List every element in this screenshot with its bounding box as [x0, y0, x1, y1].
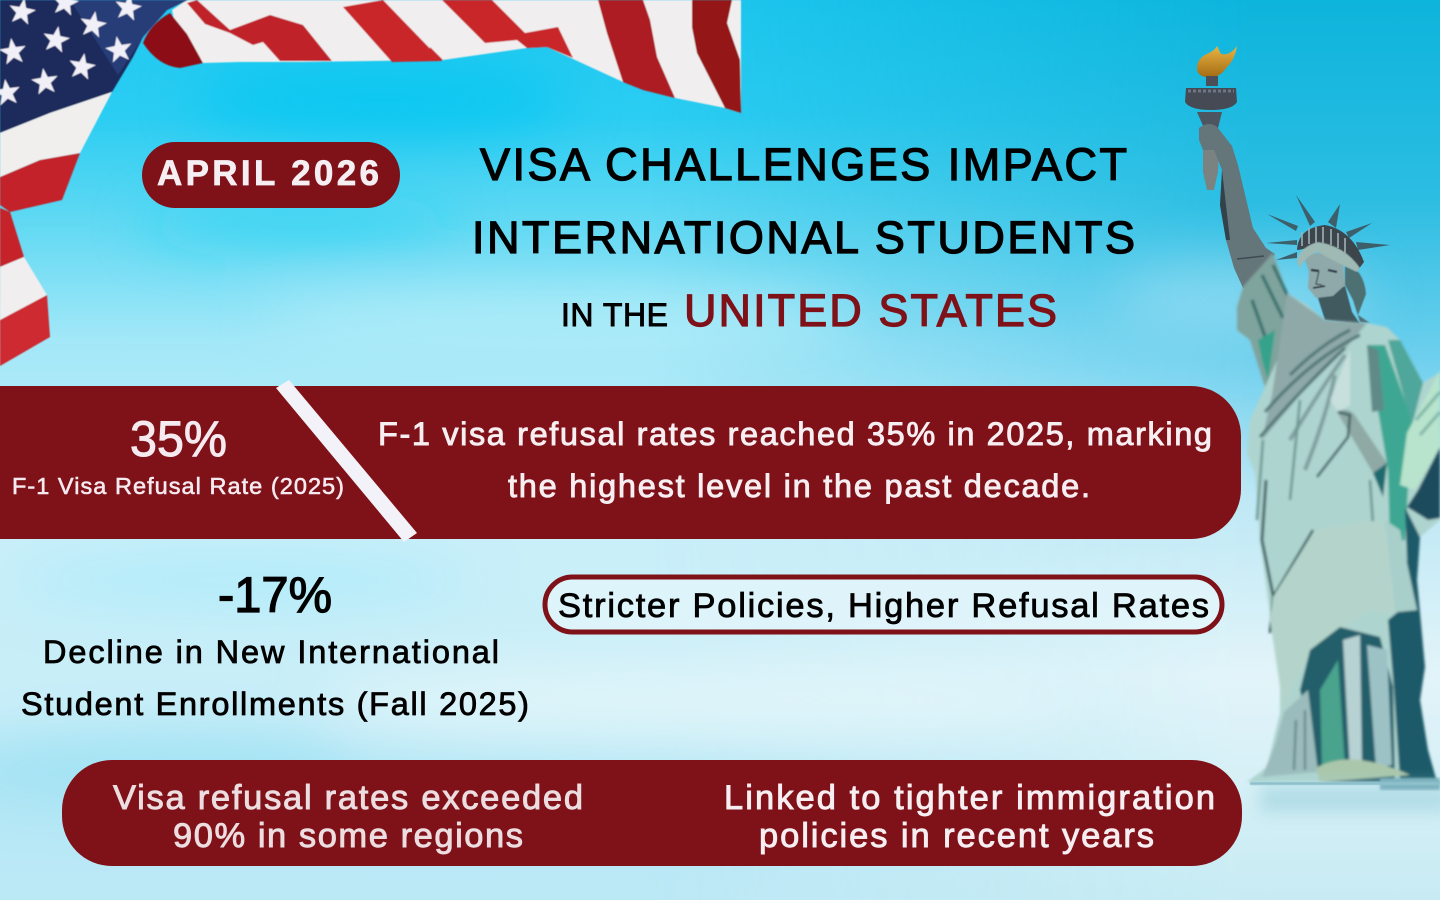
- statue: flame: [1197, 46, 1237, 77]
- robe: lower shadow: [1300, 627, 1395, 782]
- title: VISA CHALLENGES IMPACT: [480, 139, 1127, 190]
- description: [378, 416, 1212, 504]
- robe: book: [1407, 447, 1440, 520]
- stat: enrollment decline: [21, 567, 529, 722]
- stat label: F-1 Visa Refusal Rate (2025): [12, 473, 344, 499]
- badge: April 2026: APRIL 2026: [157, 154, 379, 193]
- fact: immigration policies: [724, 779, 1215, 855]
- statue: torch: [1185, 76, 1237, 190]
- flag: top drape: [143, 0, 741, 113]
- image: American flag: [0, 0, 741, 366]
- stat: enrollment decline: Student Enrollments (Fall 2025): [21, 686, 529, 722]
- statue: head: [1297, 242, 1370, 324]
- image: Statue of Liberty: [1185, 46, 1440, 812]
- robe: lower columns: [1343, 635, 1362, 770]
- flag: left stripes: [0, 92, 112, 366]
- stat: enrollment decline: -17%: [218, 567, 332, 623]
- description: F-1 visa refusal rates reached 35% in 2025, marking: [378, 416, 1212, 452]
- statue: arm and hand: [1199, 124, 1275, 290]
- fact: immigration policies: policies in recent years: [759, 817, 1154, 855]
- title: INTERNATIONAL STUDENTS: [472, 212, 1135, 263]
- statue: pedestal: [1250, 778, 1440, 812]
- title: UNITED STATES: [684, 285, 1057, 336]
- panel: bottom facts: [62, 760, 1242, 866]
- callout: stricter policies: [545, 577, 1222, 632]
- fact: refusal rates: 90% in some regions: [173, 817, 523, 855]
- badge: April 2026: [142, 142, 400, 208]
- robe: teal band: [1367, 345, 1412, 545]
- robe: central fold lines: [1337, 410, 1387, 473]
- title: [472, 139, 1135, 336]
- description: the highest level in the past decade.: [508, 468, 1090, 504]
- diagonal divider: [276, 380, 417, 542]
- callout: stricter policies: Stricter Policies, Higher Refusal Rates: [558, 587, 1209, 625]
- stat: enrollment decline: Decline in New International: [43, 634, 499, 670]
- stat: 35%: 35%: [130, 411, 227, 467]
- robe: pale panel: [1318, 525, 1372, 625]
- fact: refusal rates: [113, 779, 583, 855]
- title: IN THE: [561, 297, 668, 333]
- robe: upper shaded folds: [1237, 253, 1300, 387]
- panel: F-1 visa refusal rate: [0, 380, 1241, 542]
- statue: crown: [1266, 195, 1390, 270]
- flag: left canton with stars: [0, 0, 188, 133]
- fact: immigration policies: Linked to tighter immigration: [724, 779, 1215, 817]
- fact: refusal rates: Visa refusal rates exceeded: [113, 779, 583, 817]
- robe: hanging drape: [1270, 520, 1417, 707]
- robe: right dark side: [1388, 507, 1437, 782]
- statue: robe: [1237, 253, 1440, 782]
